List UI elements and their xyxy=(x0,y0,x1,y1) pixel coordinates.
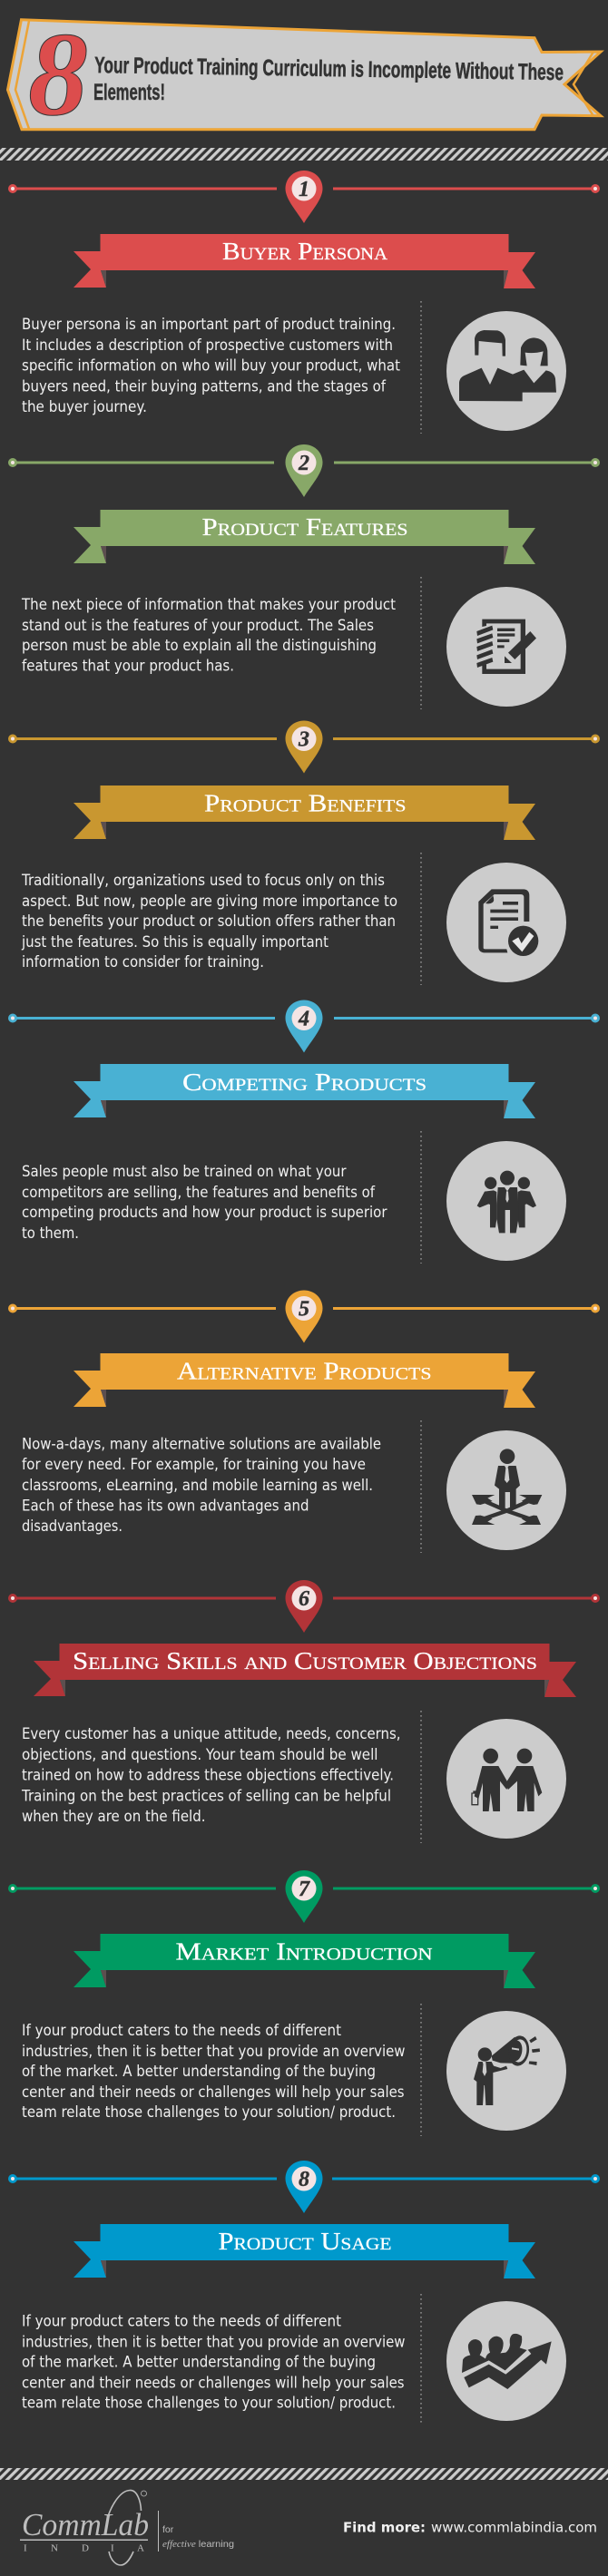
pin divider 1 xyxy=(8,171,600,223)
body text 7: center and their needs or challenges will help your sales xyxy=(22,2083,405,2102)
pin divider 8: 8 xyxy=(299,2168,309,2191)
pin divider 3 xyxy=(8,720,600,773)
body text 6: trained on how to address these objections effectively. xyxy=(22,1767,394,1785)
body text 7: of the market. A better understanding of the buying xyxy=(22,2063,376,2081)
pin divider 7 xyxy=(8,1870,600,1923)
section 3: product benefits xyxy=(8,720,600,985)
find more link text: www.commlabindia.com xyxy=(431,2520,597,2536)
section 4: competing products xyxy=(8,1000,600,1264)
logo: CommLab India: for xyxy=(162,2524,174,2535)
pin divider 6 xyxy=(8,1580,600,1633)
body text 1: It includes a description of prospective customers with xyxy=(22,337,393,355)
body text 2: features that your product has. xyxy=(22,657,234,675)
section 1: buyer persona xyxy=(8,171,600,434)
pin divider 3: 3 xyxy=(298,727,309,751)
body text 6: objections, and questions. Your team should be well xyxy=(22,1746,378,1764)
find more link text xyxy=(343,2520,597,2536)
ribbon 7: Market Introduction xyxy=(176,1937,433,1965)
icon: man with megaphone xyxy=(446,2011,566,2131)
ribbon 8 xyxy=(74,2224,535,2278)
icon: two business people xyxy=(446,1719,566,1839)
logo: CommLab India: CommLab xyxy=(22,2507,149,2542)
footer xyxy=(20,2490,597,2565)
body text 7: team relate those challenges to your solution/ product. xyxy=(22,2103,396,2122)
section 6: selling skills and customer objections xyxy=(8,1580,600,1843)
body text 4: to them. xyxy=(22,1225,79,1243)
ribbon 3: Product Benefits xyxy=(204,789,407,816)
ribbon 5: Alternative Products xyxy=(177,1357,432,1384)
pin divider 2 xyxy=(8,444,600,497)
body text 7: If your product caters to the needs of different xyxy=(22,2022,341,2040)
icon: business team xyxy=(446,1141,566,1261)
body text 5: Each of these has its own advantages and xyxy=(22,1497,309,1515)
pin divider 6: 6 xyxy=(299,1587,309,1611)
icon: man at crossroads xyxy=(446,1430,566,1550)
title text: Elements! xyxy=(93,80,165,105)
body text 4 xyxy=(22,1163,387,1243)
pin divider 2: 2 xyxy=(298,452,309,475)
body text 6: Every customer has a unique attitude, needs, concerns, xyxy=(22,1725,401,1743)
body text 1: the buyer journey. xyxy=(22,398,147,416)
body text 5 xyxy=(22,1435,381,1536)
logo: CommLab India: effective learning xyxy=(162,2539,234,2550)
body text 8: industries, then it is better that you provide an overview xyxy=(22,2333,406,2351)
body text 3: information to consider for training. xyxy=(22,953,264,971)
logo: CommLab India xyxy=(20,2490,234,2565)
icon: team with rising arrow xyxy=(446,2301,566,2421)
body text 2 xyxy=(21,596,396,675)
body text 8: center and their needs or challenges will help your sales xyxy=(22,2375,405,2393)
body text 8: team relate those challenges to your solution/ product. xyxy=(22,2395,396,2413)
ribbon 1 xyxy=(74,234,535,288)
ribbon 5 xyxy=(74,1353,535,1408)
ribbon 4: Competing Products xyxy=(182,1068,427,1096)
body text 5: disadvantages. xyxy=(22,1517,123,1536)
body text 1: buyers need, their buying patterns, and the stages of xyxy=(22,377,387,395)
body text 1: specific information on who will buy your product, what xyxy=(22,357,400,376)
section 7: market introduction xyxy=(8,1870,600,2136)
body text 3: aspect. But now, people are giving more importance to xyxy=(22,893,397,911)
body text 3: just the features. So this is equally important xyxy=(21,933,329,951)
body text 8 xyxy=(22,2313,406,2413)
body text 2: The next piece of information that makes your product xyxy=(21,596,396,614)
ribbon 4 xyxy=(74,1064,535,1118)
body text 8: If your product caters to the needs of different xyxy=(22,2313,341,2331)
ribbon 2: Product Features xyxy=(201,513,408,541)
pin divider 8 xyxy=(8,2161,600,2213)
ribbon 6 xyxy=(34,1644,576,1697)
big number 8: 8 xyxy=(28,7,88,141)
body text 1: Buyer persona is an important part of product training. xyxy=(22,316,396,334)
ribbon 8: Product Usage xyxy=(218,2228,392,2255)
icon: notebook and pencil xyxy=(446,587,566,707)
ribbon 7 xyxy=(74,1934,535,1988)
pin divider 1: 1 xyxy=(299,178,309,201)
logo: CommLab India: A xyxy=(137,2543,144,2554)
logo: CommLab India: N xyxy=(51,2543,58,2554)
section 5: alternative products xyxy=(8,1290,600,1553)
body text 6: when they are on the field. xyxy=(22,1808,205,1826)
body text 5: classrooms, eLearning, and mobile learning as well. xyxy=(22,1477,373,1495)
ribbon 1: Buyer Persona xyxy=(222,238,387,265)
logo: CommLab India: D xyxy=(82,2543,89,2554)
body text 6 xyxy=(21,1725,400,1826)
find more link text: Find more: xyxy=(343,2520,426,2536)
pin divider 5 xyxy=(8,1290,600,1342)
title text xyxy=(93,53,564,105)
body text 8: of the market. A better understanding of the buying xyxy=(22,2353,376,2371)
icon: people xyxy=(446,311,566,431)
body text 3 xyxy=(21,872,397,971)
pin divider 4 xyxy=(8,1000,600,1052)
logo: CommLab India: I xyxy=(111,2543,114,2554)
title banner xyxy=(7,7,601,141)
ribbon 6: Selling Skills and Customer Objections xyxy=(73,1647,537,1674)
body text 7 xyxy=(22,2022,406,2122)
ribbon 3 xyxy=(74,785,535,840)
body text 2: stand out is the features of your product. The Sales xyxy=(22,617,374,635)
pin divider 7: 7 xyxy=(299,1878,310,1901)
ribbon 2 xyxy=(74,510,535,564)
section 8: product usage xyxy=(8,2161,600,2425)
body text 4: competing products and how your product is superior xyxy=(22,1204,387,1222)
body text 2: person must be able to explain all the distinguishing xyxy=(22,637,377,655)
icon: document with check mark xyxy=(446,863,566,982)
body text 7: industries, then it is better that you provide an overview xyxy=(22,2043,406,2061)
body text 4: competitors are selling, the features and benefits of xyxy=(22,1184,376,1202)
body text 5: Now-a-days, many alternative solutions are available xyxy=(22,1435,381,1453)
body text 4: Sales people must also be trained on what your xyxy=(22,1163,347,1181)
body text 5: for every need. For example, for training you have xyxy=(22,1456,366,1474)
pin divider 5: 5 xyxy=(299,1297,309,1321)
logo: CommLab India: I xyxy=(24,2543,27,2554)
body text 6: Training on the best practices of selling can be helpful xyxy=(21,1787,391,1805)
body text 3: the benefits your product or solution offers rather than xyxy=(22,912,396,931)
pin divider 4: 4 xyxy=(298,1007,309,1030)
body text 3: Traditionally, organizations used to focus only on this xyxy=(21,872,385,890)
section 2: product features xyxy=(8,444,600,709)
body text 1 xyxy=(22,316,400,416)
